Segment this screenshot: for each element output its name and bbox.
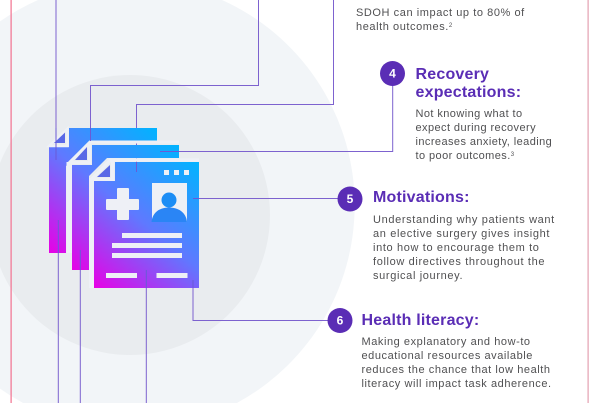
text: Motivations body: follow directives throughout the	[373, 256, 545, 268]
text: Health literacy body: educational resources available	[362, 350, 533, 362]
text: Health literacy body: reduces the chance that low health	[362, 364, 551, 376]
text: Recovery expectations body: expect during recovery	[416, 122, 536, 134]
text lines	[106, 233, 188, 278]
text: Motivations body: into how to encourage them to	[373, 242, 540, 254]
heading: Recovery expectations: expectations:	[416, 84, 521, 100]
text: Motivations body: Understanding why patients want	[373, 214, 555, 226]
number badge 4: 4	[389, 66, 396, 80]
text: Health literacy body: literacy will impact task adherence.	[362, 378, 552, 390]
text: SDOH note: SDOH can impact up to 80% of	[356, 6, 525, 18]
heading: Recovery expectations: Recovery	[416, 66, 489, 82]
number badge 4	[380, 61, 405, 86]
background circle: outer	[0, 0, 355, 403]
icon: front document	[89, 160, 199, 288]
number badge 5	[338, 186, 362, 212]
overlaid connector segments on documents	[56, 128, 199, 288]
text: Recovery expectations body: increases anxiety, leading	[416, 136, 552, 148]
dots	[164, 170, 189, 175]
number badge 6: 6	[337, 314, 344, 328]
text: Recovery expectations body: to poor outcomes.3	[416, 150, 514, 162]
text: Health literacy body	[362, 336, 552, 390]
text: Motivations body: an elective surgery gives insight	[373, 228, 550, 240]
text: Motivations body	[373, 214, 555, 282]
text: Health literacy body: Making explanatory and how-to	[362, 336, 531, 348]
text: Motivations body: surgical journey.	[373, 270, 463, 282]
text: Recovery expectations body	[416, 108, 552, 162]
portrait card	[152, 183, 187, 222]
connector lines behind the documents	[56, 0, 393, 403]
background circle: inner	[0, 75, 270, 355]
text: SDOH note	[356, 6, 525, 32]
heading: Health literacy: Health literacy:	[362, 312, 479, 328]
heading: Motivations: Motivations:	[373, 189, 470, 206]
icon: back document	[49, 128, 157, 253]
text: Recovery expectations body: Not knowing what to	[416, 108, 523, 120]
number badge 6	[328, 308, 352, 333]
medical cross	[106, 188, 139, 220]
heading: Recovery expectations	[416, 66, 521, 100]
icon: middle document	[66, 142, 179, 270]
number badge 5: 5	[347, 192, 354, 206]
text: SDOH note: health outcomes.2	[356, 20, 452, 32]
